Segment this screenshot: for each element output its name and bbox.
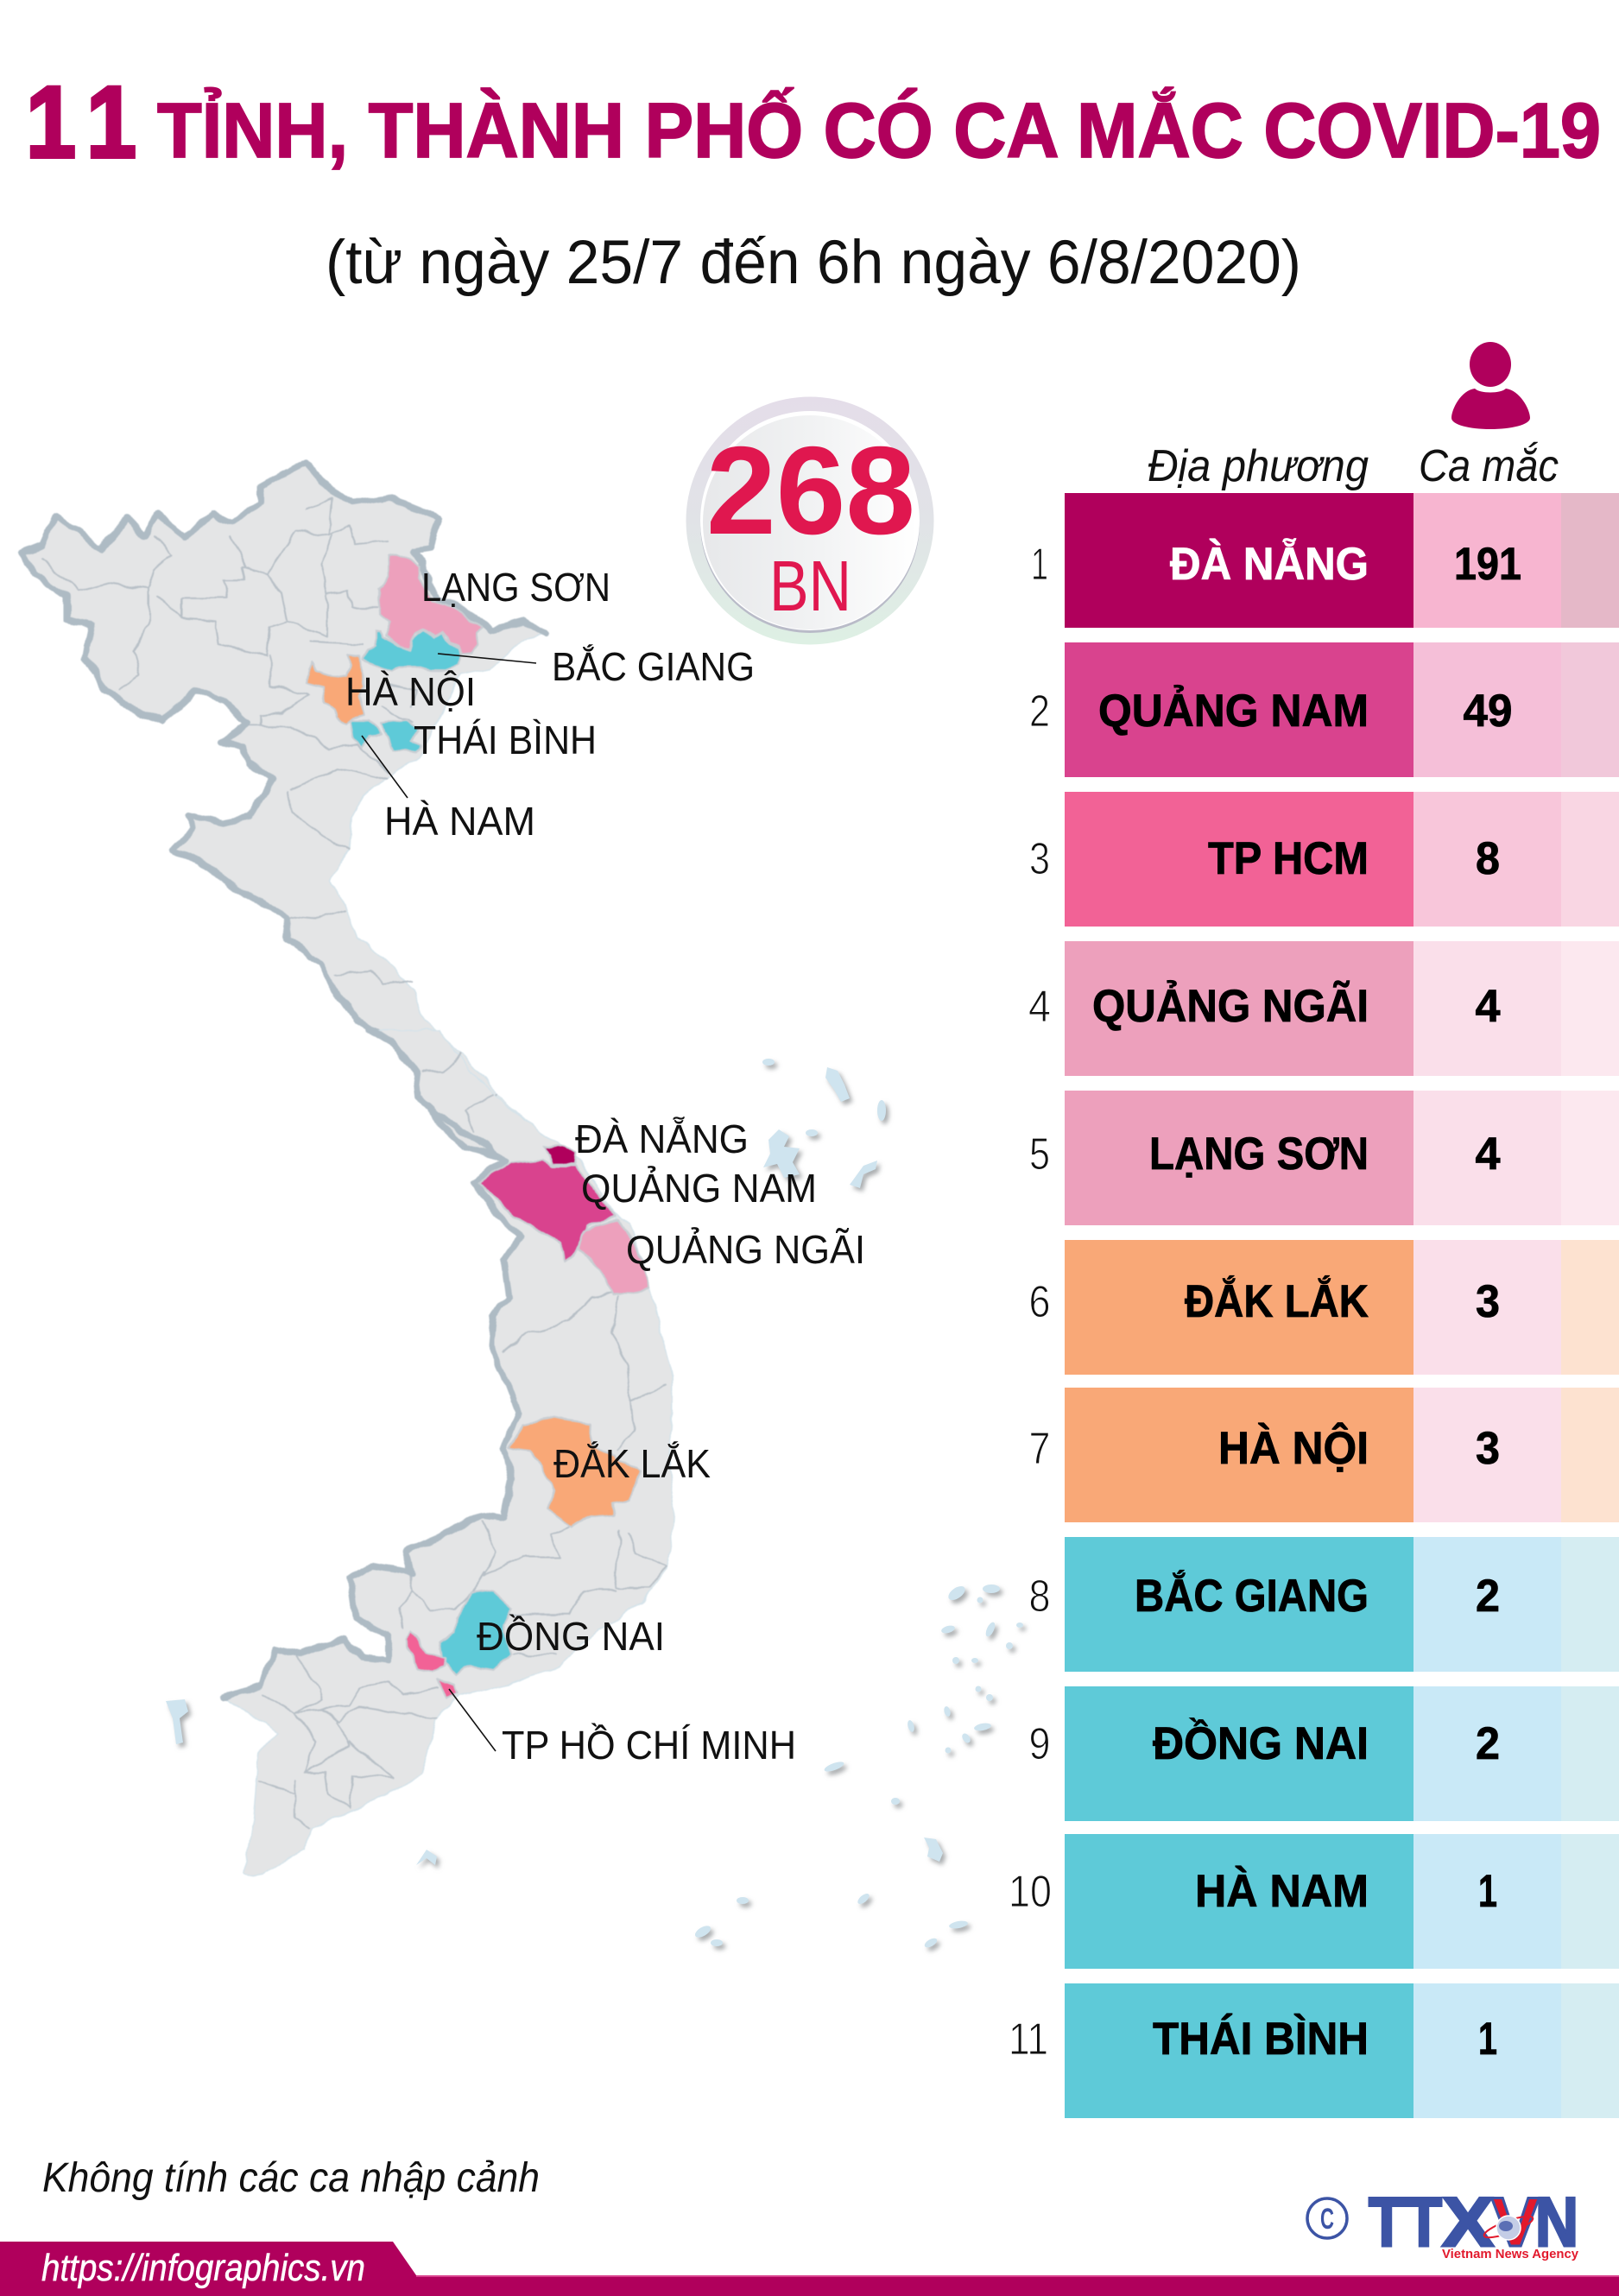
row 11 bbox=[1009, 1983, 1619, 2118]
map labels: QUẢNG NGÃI bbox=[626, 1227, 865, 1272]
map labels bbox=[345, 565, 865, 1768]
logo: TTXVN bbox=[1307, 2184, 1579, 2261]
row 6: 6 bbox=[1029, 1277, 1050, 1327]
province: Đồng Nai bbox=[440, 1591, 512, 1675]
row 11: THÁI BÌNH bbox=[1153, 2013, 1369, 2065]
row 1: 191 bbox=[1454, 539, 1521, 590]
row 9: 9 bbox=[1029, 1719, 1050, 1769]
title: 1 bbox=[86, 66, 136, 180]
map labels: THÁI BÌNH bbox=[414, 718, 597, 762]
row 5: 5 bbox=[1029, 1129, 1050, 1180]
row 9: 2 bbox=[1476, 1718, 1500, 1769]
row 3: TP HCM bbox=[1208, 833, 1369, 884]
logo letters: N bbox=[1535, 2184, 1578, 2261]
logo letters: T bbox=[1369, 2184, 1405, 2261]
row 7: 7 bbox=[1029, 1424, 1050, 1474]
row 3 bbox=[1029, 792, 1619, 927]
row 7: HÀ NỘI bbox=[1218, 1421, 1369, 1474]
row 2: 49 bbox=[1463, 686, 1513, 737]
province: Đà Nẵng bbox=[542, 1145, 577, 1165]
province: Quảng Nam bbox=[477, 1159, 617, 1262]
copyright mark bbox=[1307, 2198, 1347, 2238]
total badge: 268 BN: BN bbox=[769, 546, 851, 626]
map labels: HÀ NAM bbox=[384, 799, 535, 844]
table header: Ca mắc bbox=[1419, 441, 1559, 491]
row 4: 4 bbox=[1475, 981, 1501, 1032]
row 1: 1 bbox=[1031, 540, 1048, 590]
map labels: BẮC GIANG bbox=[552, 644, 755, 689]
row 1: ĐÀ NẴNG bbox=[1170, 537, 1369, 590]
leader lines bbox=[362, 654, 536, 1751]
row 1 bbox=[1031, 493, 1619, 628]
row 7 bbox=[1029, 1388, 1619, 1522]
row 5: LẠNG SƠN bbox=[1149, 1129, 1369, 1180]
row 10: HÀ NAM bbox=[1195, 1865, 1369, 1917]
map labels: ĐỒNG NAI bbox=[477, 1614, 665, 1659]
logo letters: V bbox=[1491, 2184, 1540, 2261]
logo: TTXVN: Vietnam News Agency bbox=[1442, 2247, 1579, 2261]
row 8 bbox=[1029, 1537, 1619, 1672]
map: northern land bbox=[22, 462, 651, 1295]
province: Lạng Sơn bbox=[378, 553, 482, 653]
map labels: HÀ NỘI bbox=[345, 669, 476, 714]
row 11: 11 bbox=[1009, 2015, 1048, 2065]
footnote: Không tính các ca nhập cảnh bbox=[42, 2155, 540, 2201]
province: Quảng Ngãi bbox=[579, 1221, 650, 1295]
row 11: 1 bbox=[1478, 2014, 1497, 2065]
row 4: 4 bbox=[1028, 982, 1051, 1032]
map labels: LẠNG SƠN bbox=[421, 565, 610, 610]
map labels: ĐÀ NẴNG bbox=[575, 1116, 749, 1161]
province: Thái Bình bbox=[380, 721, 419, 752]
logo letters: X bbox=[1442, 2184, 1494, 2261]
total badge: 268 BN bbox=[686, 397, 934, 644]
footer ribbon: https://infographics.vn bbox=[41, 2247, 365, 2289]
total badge: 268 BN: 268 bbox=[706, 421, 915, 560]
province: Bắc Giang bbox=[363, 630, 458, 672]
row 3: 3 bbox=[1029, 834, 1050, 884]
map labels: QUẢNG NAM bbox=[581, 1166, 817, 1211]
map: mainland and provinces bbox=[22, 462, 674, 1875]
row 5: 4 bbox=[1475, 1129, 1501, 1180]
logo letters bbox=[1369, 2184, 1578, 2261]
title: 1 bbox=[26, 66, 76, 180]
row 4: QUẢNG NGÃI bbox=[1092, 980, 1369, 1032]
table header: Địa phương bbox=[1148, 441, 1369, 491]
row 5 bbox=[1029, 1091, 1619, 1225]
islands bbox=[166, 1059, 1023, 1949]
subtitle: (từ ngày 25/7 đến 6h ngày 6/8/2020) bbox=[326, 229, 1301, 297]
ranking table bbox=[1009, 493, 1619, 2118]
row 3: 8 bbox=[1476, 833, 1500, 884]
row 2: 2 bbox=[1029, 686, 1050, 737]
map labels: ĐẮK LẮK bbox=[553, 1441, 711, 1486]
row 8: 8 bbox=[1029, 1572, 1050, 1622]
icon: person bbox=[1451, 342, 1530, 429]
row 9: ĐỒNG NAI bbox=[1153, 1717, 1369, 1769]
row 6: ĐẮK LẮK bbox=[1185, 1275, 1369, 1327]
row 7: 3 bbox=[1476, 1423, 1500, 1474]
map labels: TP HỒ CHÍ MINH bbox=[502, 1723, 796, 1768]
row 6: 3 bbox=[1476, 1276, 1500, 1327]
row 8: BẮC GIANG bbox=[1135, 1569, 1369, 1622]
row 10 bbox=[1009, 1834, 1619, 1969]
row 9 bbox=[1029, 1686, 1619, 1821]
row 4 bbox=[1028, 941, 1619, 1076]
row 2: QUẢNG NAM bbox=[1098, 685, 1369, 737]
row 10: 1 bbox=[1478, 1866, 1497, 1917]
map: northern provinces bbox=[307, 553, 482, 752]
logo letters: T bbox=[1406, 2184, 1442, 2261]
province: TP Hồ Chí Minh bbox=[405, 1630, 457, 1697]
province: Hà Nội bbox=[307, 655, 365, 724]
row 2 bbox=[1029, 642, 1619, 777]
map: southern land bbox=[223, 1030, 674, 1875]
footer ribbon bbox=[0, 2242, 1619, 2296]
province: Hà Nam bbox=[350, 721, 382, 749]
row 8: 2 bbox=[1476, 1571, 1500, 1622]
row 6 bbox=[1029, 1240, 1619, 1375]
table header bbox=[1148, 441, 1559, 491]
logo globe bbox=[1482, 2212, 1535, 2242]
map of Vietnam bbox=[22, 462, 1023, 1949]
copyright mark: C bbox=[1320, 2203, 1334, 2236]
province: Đắk Lắk bbox=[509, 1418, 639, 1527]
row 10: 10 bbox=[1009, 1867, 1052, 1917]
title bbox=[26, 66, 1601, 180]
